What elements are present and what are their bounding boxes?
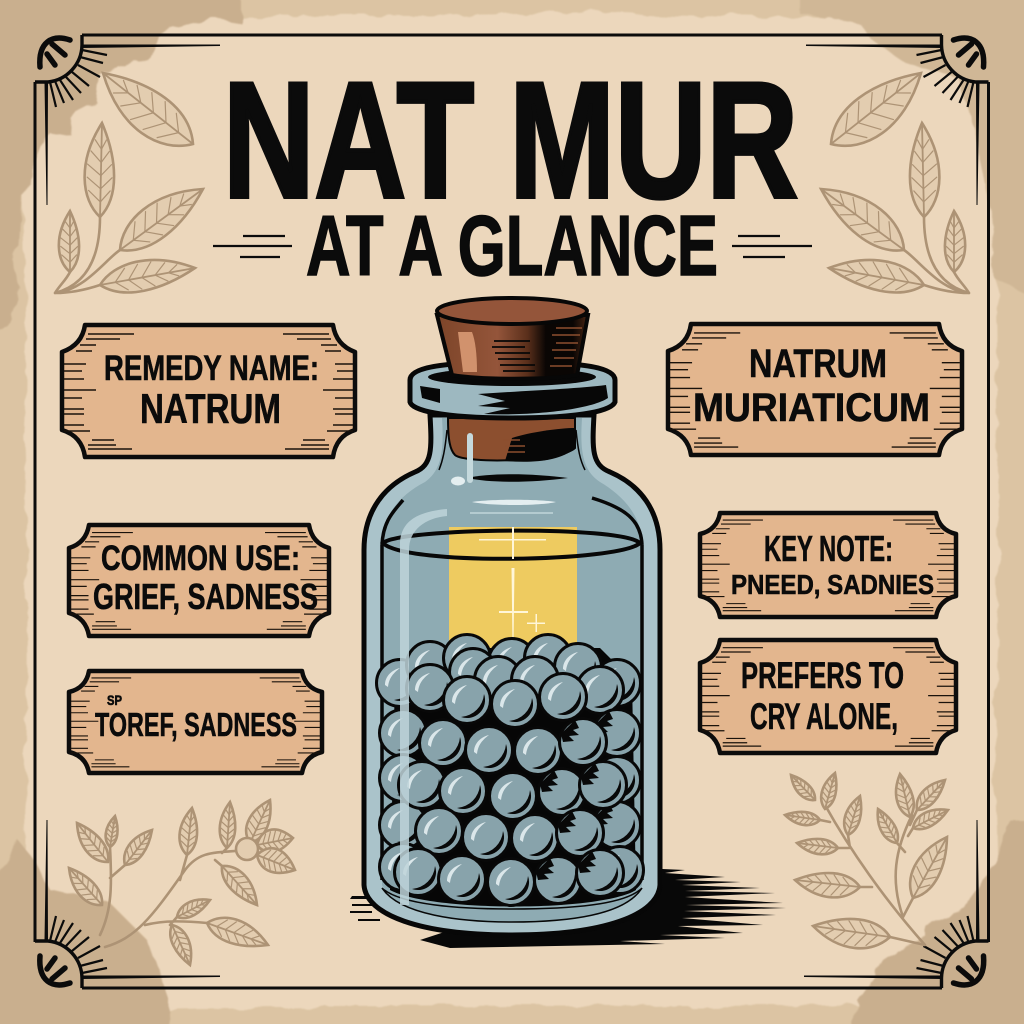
yellow glow behind liquid [449, 527, 577, 657]
vertical glass highlight [400, 509, 447, 905]
plaque: key note [700, 513, 956, 617]
plaque: natrum muriaticum: MURIATICUM [693, 386, 930, 430]
pellets [376, 634, 644, 906]
plaque: remedy name [62, 325, 355, 457]
plaque: toref, sadness: SP [107, 692, 122, 708]
plaque: key note: KEY NOTE: [764, 528, 893, 569]
plaque: common use: GRIEF, SADNESS [93, 576, 318, 617]
liquid surface [383, 531, 640, 559]
leaf cluster: top left [55, 58, 212, 298]
plaque: prefers to cry alone: CRY ALONE, [750, 696, 898, 737]
right speed lines [732, 236, 812, 257]
corner ornament: top left [35, 35, 107, 107]
glass bottle [364, 298, 660, 935]
plaque: toref, sadness: TOREF, SADNESS [95, 706, 297, 743]
left speed lines [213, 236, 292, 257]
lip of bottle [410, 362, 615, 418]
corner ornament: bottom right [916, 916, 988, 988]
plaque: natrum muriaticum: NATRUM [749, 342, 887, 386]
back row pellets [376, 634, 644, 894]
botanical sprig with flower: bottom left [61, 796, 299, 968]
plaque: natrum muriaticum [668, 324, 962, 455]
bottom glass thickness [382, 888, 642, 922]
leaf cluster: top right [812, 58, 969, 298]
sparkles [479, 527, 546, 645]
plaque: common use [69, 525, 329, 636]
neck cork [448, 418, 575, 460]
corner ornament: top right [916, 35, 988, 107]
plaque: common use: COMMON USE: [101, 539, 300, 578]
bottle body glass [364, 415, 660, 935]
plaque: key note: PNEED, SADNIES [731, 569, 934, 600]
neck cork shading [505, 428, 575, 462]
plaque: toref, sadness [69, 671, 322, 773]
corner ornament: bottom left [35, 916, 107, 988]
front row pellets [394, 664, 626, 906]
inner glass [382, 418, 642, 920]
subtitle with speed lines: AT A GLANCE [306, 199, 718, 294]
flower petals [236, 796, 299, 880]
plaque: prefers to cry alone [700, 640, 956, 753]
shoulder highlights [439, 430, 585, 513]
botanical sprig: bottom right [784, 771, 957, 953]
lip shading [478, 385, 608, 414]
plaque: remedy name: REMEDY NAME: [104, 349, 319, 388]
title: NAT MUR [223, 48, 798, 232]
cork stopper [437, 298, 588, 379]
bottle cast shadow [350, 868, 786, 948]
lip opening [428, 368, 596, 386]
plaque: prefers to cry alone: PREFERS TO [741, 655, 904, 696]
plaque: remedy name: NATRUM [140, 385, 281, 432]
inner wall lines [382, 498, 642, 880]
